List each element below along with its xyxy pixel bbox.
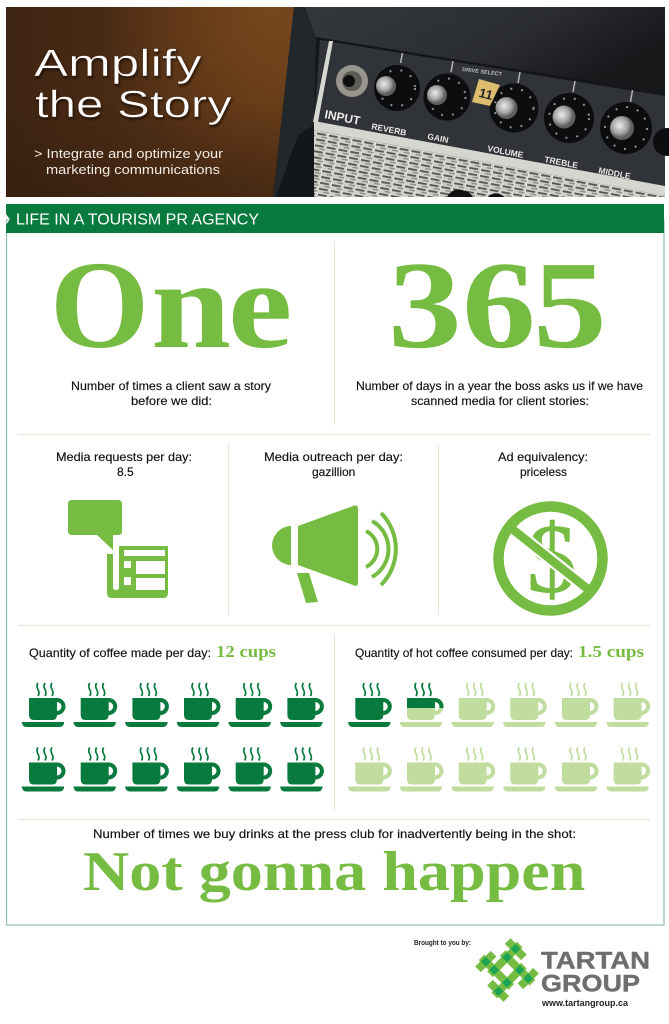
label: 8.5 — [117, 465, 134, 479]
logo wordmark: GROUP — [541, 970, 640, 998]
drive select tape: 11 — [477, 85, 494, 103]
label: priceless — [520, 465, 567, 479]
cup grid: 12 cups — [22, 683, 324, 792]
subtitle: marketing communications — [46, 162, 221, 177]
big word One: n — [151, 237, 231, 375]
icon: crossed out dollar: $ — [527, 503, 577, 614]
stat: media requests — [56, 450, 192, 598]
logo wordmark — [541, 948, 650, 998]
amp labels: REVERB — [371, 121, 407, 138]
amp labels: GAIN — [427, 131, 449, 145]
big phrase: Not gonna happen — [83, 841, 585, 903]
amp labels: VOLUME — [487, 143, 525, 160]
amp labels: TREBLE — [544, 154, 579, 171]
icon: speech bubble and newspaper — [68, 500, 168, 598]
stat: One — [50, 236, 292, 408]
title — [34, 41, 232, 126]
stat: ad equivalency — [498, 450, 602, 614]
big word One — [50, 236, 292, 375]
caption: Number of days in a year the boss asks us if we have — [356, 379, 643, 393]
big word One: O — [50, 236, 149, 375]
logo mark: tartan weave — [469, 932, 545, 1008]
website: www.tartangroup.ca — [541, 998, 629, 1009]
content panel — [6, 220, 664, 925]
caption — [71, 379, 271, 408]
amp labels: MIDDLE — [598, 165, 632, 181]
label: Media outreach per day: — [264, 450, 403, 464]
label — [264, 450, 403, 479]
section heading bar — [6, 204, 664, 233]
label: Quantity of coffee made per day: — [29, 646, 211, 660]
subtitle: > Integrate and optimize your — [34, 146, 224, 161]
label — [29, 642, 276, 661]
caption: scanned media for client stories: — [411, 394, 589, 408]
section heading bar: LIFE IN A TOURISM PR AGENCY — [16, 212, 259, 228]
subtitle — [34, 146, 224, 177]
stat: media outreach — [264, 450, 403, 603]
hot coffee consumed — [348, 642, 650, 792]
big word One: e — [228, 236, 292, 375]
label — [498, 450, 588, 479]
caption: Number of times a client saw a story — [71, 379, 271, 393]
big number 365: 5 — [533, 235, 607, 374]
label — [56, 450, 192, 479]
label: Number of times we buy drinks at the press club for inadvertently being in the shot: — [93, 827, 576, 841]
footer credit — [414, 932, 650, 1009]
amp knobs — [374, 53, 669, 156]
label: 12 cups — [216, 642, 276, 661]
cup grid: 1.5 of 12 cups hot — [348, 683, 650, 792]
amp labels: INPUT — [323, 107, 362, 128]
label: Ad equivalency: — [498, 450, 588, 464]
stat: 365 — [356, 235, 643, 408]
brought to you by: Brought to you by: — [414, 940, 471, 947]
amp labels: DRIVE SELECT — [462, 67, 503, 78]
label: Quantity of hot coffee consumed per day: — [355, 646, 573, 660]
title: Amplify — [34, 41, 202, 84]
drive select tape — [472, 79, 500, 106]
big number 365 — [388, 235, 607, 374]
icon: megaphone — [272, 505, 396, 603]
input jack — [336, 65, 368, 97]
big number 365: 3 — [388, 235, 462, 374]
title: the Story — [35, 83, 232, 126]
label: 1.5 cups — [578, 642, 644, 661]
caption — [356, 379, 643, 408]
header banner — [6, 7, 669, 197]
label: Media requests per day: — [56, 450, 192, 464]
guitar amplifier photo — [273, 7, 669, 197]
icon: crossed out dollar — [498, 503, 602, 614]
brown background panel — [6, 7, 306, 197]
amp labels — [323, 67, 632, 181]
logo wordmark: TARTAN — [541, 948, 650, 974]
label — [355, 642, 644, 661]
press club stat — [83, 827, 585, 903]
big number 365: 6 — [462, 235, 536, 374]
coffee made — [22, 642, 324, 792]
caption: before we did: — [131, 394, 212, 408]
label: gazillion — [312, 465, 355, 479]
